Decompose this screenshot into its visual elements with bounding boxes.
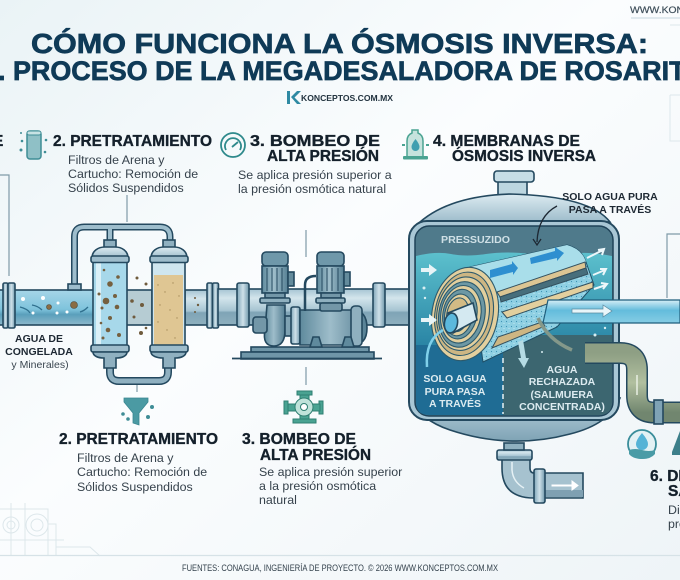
motor 2 <box>305 252 350 311</box>
motor 1 <box>260 252 294 303</box>
rejected water label: CONCENTRADA) <box>519 401 605 413</box>
inlet label <box>5 333 73 371</box>
bottom outlet pipe <box>497 443 583 503</box>
pump volute <box>264 305 285 346</box>
step 3 top text: 3. BOMBEO DE <box>250 133 380 150</box>
vessel window <box>415 226 613 416</box>
rejected water label: AGUA <box>547 364 578 376</box>
flow arrows on membrane <box>490 247 564 278</box>
vessel dome top <box>420 194 610 222</box>
step 2 top text: Cartucho: Remoción de <box>68 167 198 181</box>
step 2 lower text: Sólidos Suspendidos <box>77 480 193 494</box>
pump base <box>232 347 382 359</box>
icon: water drop circle <box>628 430 656 459</box>
feed pipe over filters <box>68 227 170 290</box>
bubbles <box>422 286 606 353</box>
step 3 top text: la presión osmótica natural <box>238 182 386 196</box>
brine flow arrow <box>538 318 572 350</box>
inlet label: CONGELADA <box>5 346 73 358</box>
icon: membrane vessel <box>402 130 429 160</box>
filter 2: sand column <box>150 240 188 368</box>
lower left seawater <box>416 345 503 415</box>
brine down arrow <box>518 340 529 368</box>
step 3 lower text: ALTA PRESIÓN <box>260 446 371 464</box>
step 2 lower text <box>59 431 218 494</box>
step 2 lower text: 2. PRETRATAMIENTO <box>59 431 218 448</box>
inlet flow arrows <box>421 264 437 326</box>
inlet label: y Minerales) <box>11 359 69 371</box>
membrane roll body <box>470 245 594 362</box>
step 3 lower text <box>242 431 402 507</box>
vessel shell <box>409 221 619 420</box>
step 3 lower text: Se aplica presión superior <box>259 465 402 479</box>
step 2 top text <box>53 133 212 195</box>
core tube <box>443 303 477 334</box>
step 4 text: ÓSMOSIS INVERSA <box>452 147 596 165</box>
pump horizontal body <box>300 310 367 345</box>
product water pipe <box>543 300 680 323</box>
footer rule <box>0 554 680 556</box>
step 3 top text: Se aplica presión superior a <box>238 168 392 182</box>
water area <box>416 252 612 345</box>
footer sources: FUENTES: CONAGUA, INGENIERÍA DE PROYECTO. © 2026 WWW.KONCEPTOS.COM.MX <box>182 563 498 573</box>
step 3 top text <box>238 133 392 196</box>
title <box>0 28 680 86</box>
callout: only pure water passes: PASA A TRAVÉS <box>569 203 651 216</box>
logo <box>287 91 393 104</box>
filter 1: water column <box>91 240 129 368</box>
flange after filters <box>207 283 218 328</box>
inlet pipe <box>0 290 96 325</box>
membrane spiral end <box>424 262 506 366</box>
pressurized label: PRESSUZIDO <box>441 234 510 246</box>
callout leader lines <box>0 175 680 392</box>
icon: clipped discharge <box>672 431 680 455</box>
pump flanges <box>237 283 385 327</box>
step 2 lower text: Cartucho: Remoción de <box>77 465 207 479</box>
icon: pump <box>284 391 323 423</box>
rejected water label: (SALMUERA <box>530 389 594 401</box>
sand layers <box>492 262 593 348</box>
website top right: WWW.KON <box>630 5 680 16</box>
lower right brine <box>503 335 612 415</box>
callout: only pure water passes <box>533 191 658 245</box>
connecting pipe between filters <box>126 276 209 335</box>
permeate label in vessel: SOLO AGUA <box>423 373 487 385</box>
pressure vessel <box>409 171 680 441</box>
permeate label in vessel <box>423 373 487 410</box>
permeate arrows <box>587 249 607 289</box>
step 2 top text: Sólidos Suspendidos <box>68 181 184 195</box>
vessel neck <box>494 171 534 196</box>
step 4 text: 4. MEMBRANAS DE <box>433 133 580 150</box>
step 4 text <box>433 133 596 165</box>
step 2 lower text: Filtros de Arena y <box>77 451 174 465</box>
membrane top layer <box>470 245 586 292</box>
vessel bottom dome <box>410 398 620 441</box>
return pipe under filters <box>110 360 168 381</box>
pump connector <box>285 316 295 336</box>
dashed divider <box>502 358 504 414</box>
step 3 lower text: natural <box>259 493 297 507</box>
rejected water label <box>519 364 605 413</box>
icon: funnel <box>121 398 154 425</box>
logo: KONCEPTOS.COM.MX <box>301 93 393 103</box>
brine discharge pipe <box>585 353 680 424</box>
step 3 top text: ALTA PRESIÓN <box>267 147 379 165</box>
step 3 lower text: 3. BOMBEO DE <box>242 431 356 448</box>
icon: gauge <box>221 133 245 157</box>
step 2 top text: Filtros de Arena y <box>68 153 165 167</box>
step 3 lower text: a la presión osmótica <box>259 479 376 493</box>
pipe to pump and vessel <box>218 289 410 325</box>
high pressure pump <box>232 252 385 359</box>
icon: filter cartridge <box>20 131 47 159</box>
inlet label: AGUA DE <box>15 333 63 345</box>
permeate label in vessel: PURA PASA <box>425 386 486 398</box>
step 2 top text: 2. PRETRATAMIENTO <box>53 133 212 150</box>
title: CÓMO FUNCIONA LA ÓSMOSIS INVERSA: <box>31 28 648 59</box>
pump feet <box>310 337 354 347</box>
step 6 clipped text <box>650 468 680 531</box>
inlet flange <box>3 283 15 328</box>
permeate label in vessel: A TRAVÉS <box>429 397 481 410</box>
rejected water label: RECHAZADA <box>529 376 596 388</box>
callout: only pure water passes: SOLO AGUA PURA <box>562 191 658 203</box>
blue flow curve <box>427 330 443 367</box>
